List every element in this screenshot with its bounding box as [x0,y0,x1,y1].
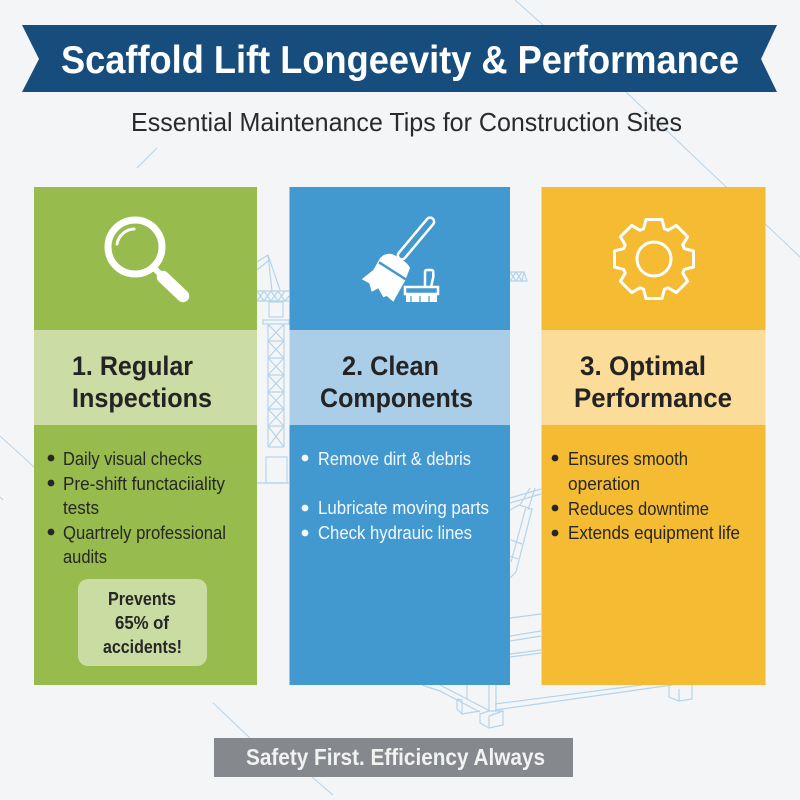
checklist: Check hydrauic lines [318,523,472,543]
heading band: Inspections [72,383,212,413]
footer text: Safety First. Efficiency Always [246,744,545,770]
heading band: 3. Optimal [580,351,706,381]
callout: prevents 65% of accidents: accidents! [103,637,182,657]
callout: prevents 65% of accidents: 65% of [115,613,170,633]
checklist: tests [63,498,99,518]
panel: optimal performance [542,187,766,685]
checklist: operation [568,474,640,494]
checklist: Extends equipment life [568,523,740,543]
panel: clean components [290,187,510,685]
heading band [34,330,257,425]
checklist [552,449,740,543]
panel: regular inspections [34,187,257,685]
heading band: 2. Clean [342,351,439,381]
icon: broom and brush [362,216,438,302]
checklist: Remove dirt & debris [318,449,471,469]
icon: gear [614,220,694,298]
footer banner [214,738,573,777]
checklist: Quartrely professional [63,523,226,543]
checklist: Reduces downtime [568,499,709,519]
callout: prevents 65% of accidents: Prevents [108,589,176,609]
subtitle: Essential Maintenance Tips for Construction Sites [131,107,682,137]
callout: prevents 65% of accidents [78,579,207,666]
heading band: 1. Regular [72,351,193,381]
icon: magnifying glass [108,220,183,296]
title text: Scaffold Lift Longeevity & Performance [61,39,739,82]
checklist: Ensures smooth [568,449,688,469]
checklist: audits [63,547,107,567]
title banner [22,25,777,92]
checklist [48,449,226,567]
checklist [302,449,489,543]
checklist: Lubricate moving parts [318,498,489,518]
checklist: Pre-shift functaciiality [63,474,225,494]
checklist: Daily visual checks [63,449,202,469]
heading band [290,330,510,425]
heading band: Performance [574,383,732,413]
heading band: Components [320,383,473,413]
heading band [542,330,766,425]
